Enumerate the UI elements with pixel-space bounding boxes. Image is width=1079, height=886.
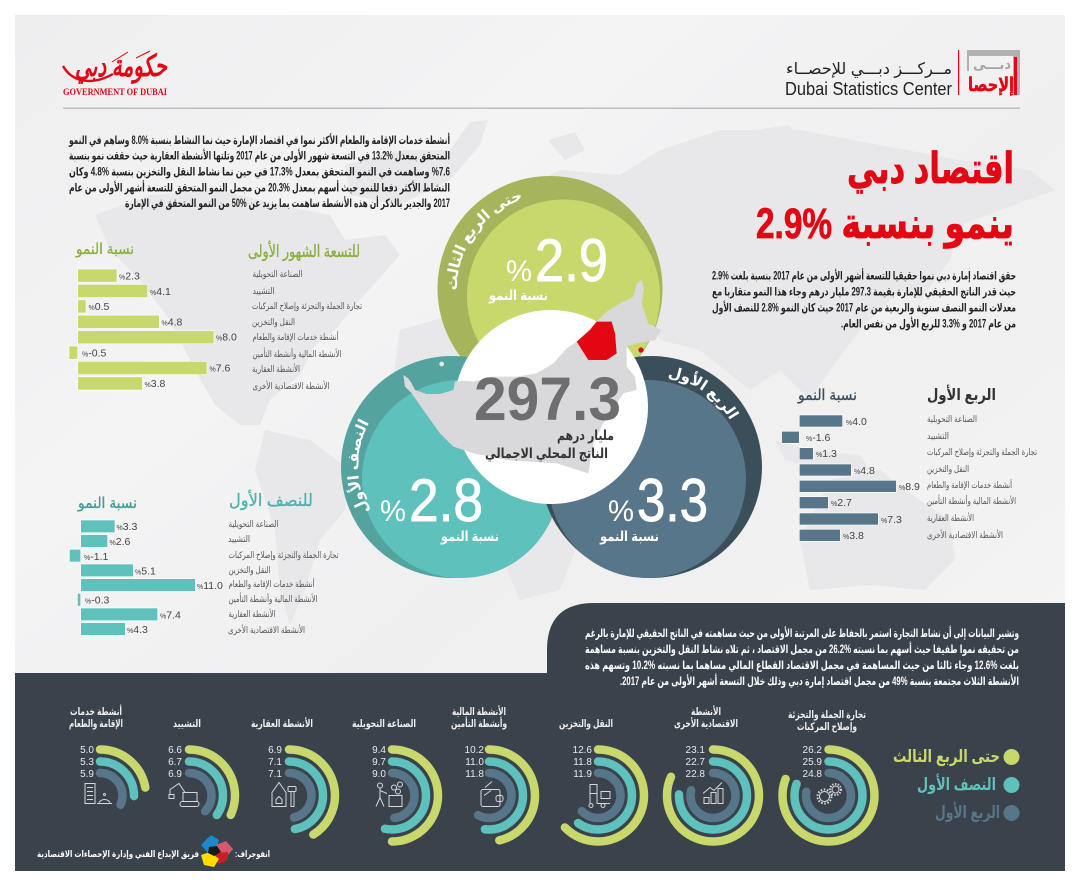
logo: Dubai Statistics Center: Dubai Statistics Center <box>785 79 952 99</box>
legend <box>893 747 1020 823</box>
circle: nine months: حتى الربع الثالث <box>447 195 521 290</box>
donut: manufacturing: الصناعة التحويلية <box>352 718 416 730</box>
bar chart: %-1.6 <box>806 432 830 444</box>
bar chart: %-0.5 <box>82 348 106 360</box>
sector labels: أنشطة خدمات الإقامة والطعام <box>228 578 314 590</box>
bar chart: %3.8 <box>843 530 864 542</box>
bar chart <box>782 415 920 542</box>
panel: first half chart <box>69 490 339 636</box>
icon: house tag and key <box>272 782 296 806</box>
donut: transport and storage: 11.9 <box>573 769 592 780</box>
chart heading: للنصف الأول <box>229 490 313 510</box>
text block: activities growth: المتحقق بمعدل %13.2 في التسعة شهور الأولى من عام 2017 وتلتها الأنشطة العقارية حيث حققت نمو بنسبة <box>69 148 450 164</box>
donut: accommodation and food: 5.3 <box>80 757 94 768</box>
donut: other economic activities <box>667 705 759 842</box>
logo: Dubai Statistics Center: إلإحصا <box>968 75 1014 96</box>
bar chart <box>69 520 223 636</box>
donut: financial and insurance: الأنشطة المالية <box>452 705 506 718</box>
logo: Dubai Statistics Center: دبـــي <box>973 56 1011 73</box>
bar chart: %8.9 <box>899 481 920 493</box>
bar chart: %0.5 <box>88 301 109 313</box>
circle: nine months: % <box>506 255 532 288</box>
sector labels: الأنشطة الاقتصادية الأخرى <box>252 380 330 391</box>
sector labels <box>228 519 339 635</box>
circle: first quarter: % <box>608 495 634 528</box>
donut: wholesale and retail trade <box>782 709 874 842</box>
circle: nine months: نسبة النمو <box>488 287 548 304</box>
text block: summary <box>712 268 1016 332</box>
GDP figures: الناتج المحلي الاجمالي <box>485 445 608 462</box>
bar chart: %3.3 <box>116 521 137 533</box>
title: اقتصاد دبي <box>847 145 1014 194</box>
text block: activities growth: 2017 والجدير بالذكر أن هذه الأنشطة ساهمت بما يزيد عن %50 من النمو المتحقق في الإمارة <box>125 195 450 211</box>
donut: other economic activities: 22.8 <box>686 769 705 780</box>
donut: transport and storage: النقل والتخزين <box>559 718 613 730</box>
donut: accommodation and food: 5.9 <box>80 769 94 780</box>
text block: trade contribution: الأنشطة الثلاث مجتمعة بنسبة %49 من مجمل اقتصاد إمارة دبي وذلك خلال التسعة أشهر الأولى من عام 2017. <box>620 673 1019 689</box>
donut: real estate <box>243 717 335 842</box>
circle: first quarter: نسبة النمو <box>599 528 659 545</box>
bar chart: %4.3 <box>127 624 148 636</box>
donut: accommodation and food <box>54 704 146 842</box>
circle: nine months <box>438 176 662 358</box>
dark footer panel <box>15 603 1065 871</box>
sector labels: الأنشطة العقارية <box>252 363 300 374</box>
sector labels: الصناعة التحويلية <box>228 519 278 529</box>
panel: first quarter chart <box>782 385 1037 542</box>
credits: فريق الإبداع الفني وإدارة الإحصاءات الاقتصادية <box>37 849 199 860</box>
donut: financial and insurance: 11.8 <box>465 769 484 780</box>
bar chart: %4.8 <box>162 316 182 328</box>
sector labels: التشييد <box>927 431 949 441</box>
circle: first half <box>341 356 552 578</box>
bar chart <box>69 269 237 390</box>
bar chart: %-1.1 <box>84 551 108 563</box>
panel: nine months chart <box>69 241 362 391</box>
donut: accommodation and food: 5.0 <box>80 745 94 756</box>
map: UAE with Dubai highlighted <box>403 280 662 473</box>
GDP figures: 297.3 <box>474 365 621 433</box>
icon: factory worker <box>376 782 402 806</box>
sector labels: أنشطة خدمات الإقامة والطعام <box>927 479 1012 491</box>
circle: first half: النصف الأول <box>346 418 370 512</box>
center GDP circle <box>454 310 648 504</box>
donut: construction: التشييد <box>173 718 201 730</box>
donut: other economic activities: 22.7 <box>686 757 705 768</box>
bar chart: %4.1 <box>150 286 171 298</box>
logo: government of Dubai: حكومة دبي <box>75 50 168 84</box>
icon: growth chart <box>703 782 723 804</box>
circle: first quarter <box>546 356 762 578</box>
title: ينمو بنسبة %2.9 <box>756 200 1014 249</box>
bar chart: %4.0 <box>846 416 867 428</box>
bar chart: %2.7 <box>831 497 852 509</box>
GDP figures: مليار درهم <box>557 427 614 443</box>
donut: construction: 6.6 <box>168 745 182 756</box>
donut: wholesale and retail trade: 24.8 <box>803 769 822 780</box>
circle: first half: % <box>380 495 406 528</box>
bar chart: %7.3 <box>881 514 902 526</box>
sector labels: النقل والتخزين <box>927 464 969 474</box>
legend: الربع الأول <box>935 802 1000 823</box>
donut: financial and insurance <box>443 705 535 842</box>
icon: gears <box>818 784 841 804</box>
logo: government of Dubai <box>63 50 168 97</box>
bar chart: %11.0 <box>197 580 223 592</box>
donut: manufacturing: 9.4 <box>372 745 386 756</box>
sector labels: التشييد <box>252 286 274 296</box>
donut: financial and insurance: وأنشطة التأمين <box>451 716 507 730</box>
bar chart: %7.6 <box>210 362 230 374</box>
text block: trade contribution <box>585 625 1019 689</box>
circle: first quarter: الربع الأول <box>668 368 740 420</box>
column heading: نسبة النمو <box>75 241 134 258</box>
icon: colour cubes <box>201 835 233 867</box>
icon: hotel and cloche <box>85 784 112 804</box>
logo: Dubai Statistics Center <box>785 50 1020 99</box>
column heading: نسبة النمو <box>797 387 857 404</box>
donut: wholesale and retail trade: وإصلاح المركبات <box>797 721 857 733</box>
sector labels: الأنشطة المالية وأنشطة التأمين <box>927 494 1016 506</box>
bar chart: %7.4 <box>160 610 181 622</box>
donut: other economic activities: 23.1 <box>686 745 705 756</box>
sector labels: الصناعة التحويلية <box>927 414 977 424</box>
circle: first half: نسبة النمو <box>440 528 499 545</box>
header divider <box>63 108 1020 109</box>
chart heading: الربع الأول <box>927 385 996 404</box>
icon: wallet <box>481 782 503 806</box>
text block: summary: من عام 2017 و %3.3 للربع الأول من نفس العام. <box>841 316 1016 332</box>
circle: first half: 2.8 <box>409 467 483 534</box>
sector labels <box>927 414 1037 540</box>
sector labels: الصناعة التحويلية <box>252 269 302 279</box>
text block: activities growth <box>68 132 450 211</box>
donut: transport and storage: 11.8 <box>573 757 592 768</box>
bar chart: %8.0 <box>216 332 237 344</box>
sector labels: الأنشطة العقارية <box>927 512 974 523</box>
donut: construction: 6.9 <box>168 769 182 780</box>
sector labels <box>252 269 362 391</box>
donut: accommodation and food: أنشطة خدمات <box>70 704 122 718</box>
donut: construction <box>143 718 235 842</box>
sector labels: تجارة الجملة والتجزئة وإصلاح المركبات <box>927 447 1037 458</box>
sector labels: الأنشطة الاقتصادية الأخرى <box>228 624 305 635</box>
logo: government of Dubai: GOVERNMENT OF DUBAI <box>63 87 167 97</box>
donut: real estate: 7.1 <box>268 757 282 768</box>
donut: manufacturing: 9.7 <box>372 757 386 768</box>
donut: transport and storage <box>552 718 644 842</box>
donut: wholesale and retail trade: 25.9 <box>803 757 822 768</box>
GDP figures <box>474 365 621 462</box>
icon: forklift <box>589 784 610 808</box>
donut: real estate: الأنشطة العقارية <box>251 717 313 730</box>
legend: حتى الربع الثالث <box>893 747 1000 767</box>
sector labels: تجارة الجملة والتجزئة وإصلاح المركبات <box>228 550 339 561</box>
bar chart: %1.3 <box>816 448 837 460</box>
bar chart: %2.3 <box>119 270 140 282</box>
donut: wholesale and retail trade: 26.2 <box>803 745 822 756</box>
title <box>756 145 1014 249</box>
column heading: نسبة النمو <box>77 495 137 512</box>
circle: nine months: 2.9 <box>535 227 608 294</box>
bar chart: %3.8 <box>144 378 165 390</box>
donut: financial and insurance: 10.2 <box>465 745 484 756</box>
donut: real estate: 7.1 <box>268 769 282 780</box>
legend: النصف الأول <box>917 774 996 795</box>
donut: wholesale and retail trade: تجارة الجملة والتجزئة <box>788 709 866 721</box>
sector labels: الأنشطة العقارية <box>228 608 276 619</box>
chart heading: للتسعة الشهور الأولى <box>248 241 360 262</box>
donut: real estate: 6.9 <box>268 745 282 756</box>
sector labels: أنشطة خدمات الإقامة والطعام <box>252 331 338 343</box>
donut: other economic activities: الاقتصادية الأخرى <box>674 717 738 730</box>
text block: activities growth: %7.6 وساهمت في النمو المتحقق بمعدل %17.3 في حين نما نشاط النقل والتخزين بنسبة %4.8 وكان <box>69 166 450 180</box>
text block: summary: حيث قدر الناتج الحقيقي للإمارة بقيمة 297.3 مليار درهم وجاء هذا النمو متقاربا مع <box>712 286 1016 300</box>
bar chart: %-0.3 <box>85 594 109 606</box>
logo: Dubai Statistics Center: مــركـــز دبـــي للإحصــاء <box>786 61 952 79</box>
sector labels: النقل والتخزين <box>252 317 295 327</box>
circle: first quarter: 3.3 <box>637 467 708 534</box>
bar chart: %4.8 <box>854 465 875 477</box>
text block: activities growth: أنشطة خدمات الإقامة والطعام الأكثر نموا في اقتصاد الإمارة حيث نما النشاط بنسبة %8.0 وساهم في النمو <box>68 132 450 148</box>
bar chart: %5.1 <box>135 566 156 578</box>
icon: excavator <box>169 784 199 806</box>
sector labels: الأنشطة الاقتصادية الأخرى <box>927 529 1003 540</box>
text block: activities growth: النشاط الأكثر دفعا للنمو حيث أسهم بمعدل %20.3 من مجمل النمو المتحقق للتسعة أشهر الأولى من عام <box>69 180 450 196</box>
credits <box>37 835 270 867</box>
credits: انفوجراف: <box>235 849 270 860</box>
world map background <box>95 120 1055 625</box>
donut: manufacturing <box>346 718 438 842</box>
donut: transport and storage: 12.6 <box>573 745 592 756</box>
sector labels: الأنشطة المالية وأنشطة التأمين <box>228 592 318 604</box>
donut: financial and insurance: 11.0 <box>465 757 484 768</box>
sector labels: تجارة الجملة والتجزئة وإصلاح المركبات <box>252 301 362 312</box>
donut: manufacturing: 9.0 <box>372 769 386 780</box>
donut: construction: 6.7 <box>168 757 182 768</box>
donut: other economic activities: الأنشطة <box>691 705 721 718</box>
bar chart: %2.6 <box>110 536 130 548</box>
sector labels: التشييد <box>228 534 250 544</box>
sector labels: الأنشطة المالية وأنشطة التأمين <box>252 347 342 359</box>
donut: accommodation and food: الإقامة والطعام <box>69 718 123 730</box>
sector labels: النقل والتخزين <box>228 565 270 575</box>
